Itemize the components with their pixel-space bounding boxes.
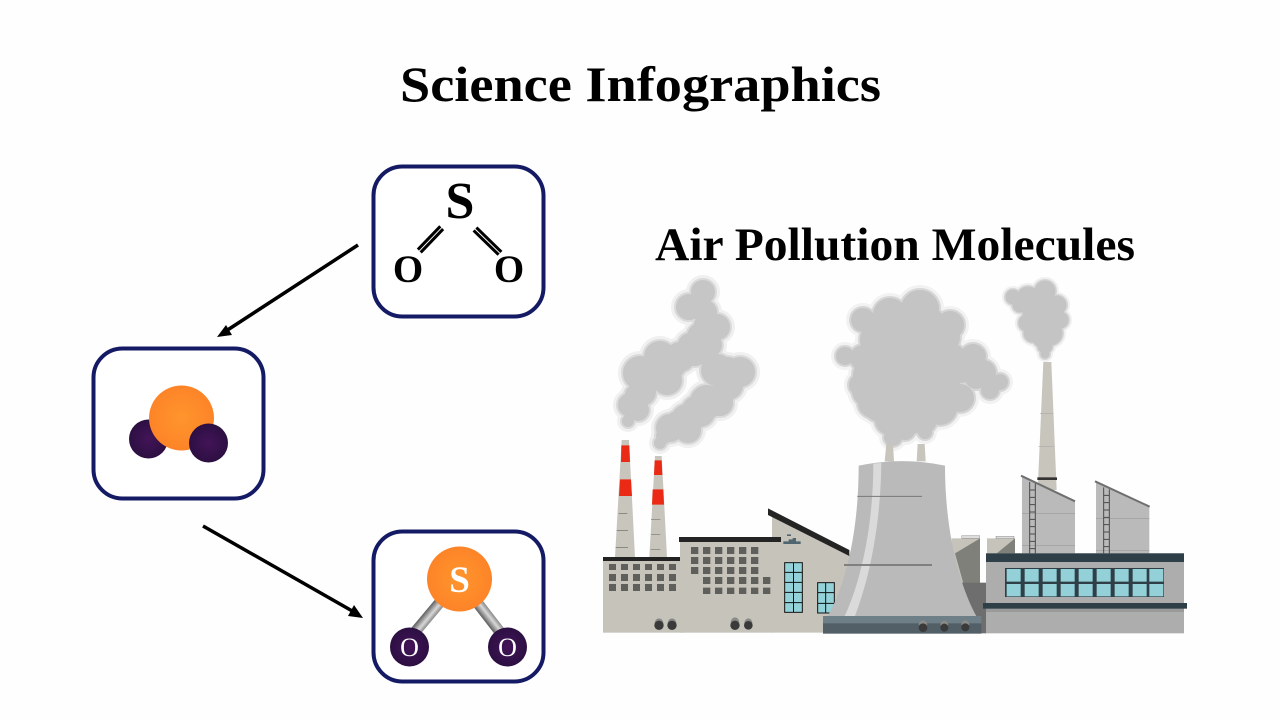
vents: pairs of pipes bbox=[654, 617, 753, 630]
panel: ball-and-stick model bbox=[374, 532, 544, 682]
shed: left bbox=[1021, 476, 1075, 553]
atom: left oxygen: O bbox=[400, 633, 419, 662]
atom: sulfur: S bbox=[449, 560, 470, 601]
illustration: factory with smoke bbox=[603, 282, 1187, 634]
panel: SO2 structural formula bbox=[374, 166, 544, 316]
smoke: tall stack bbox=[1007, 282, 1067, 357]
bond: right bbox=[476, 601, 500, 632]
chimney: second bbox=[649, 456, 667, 557]
double bond: left bbox=[418, 226, 443, 252]
panel: space-filling model bbox=[94, 348, 264, 498]
building: right block bbox=[983, 553, 1187, 633]
smoke: left chimneys bbox=[620, 282, 753, 447]
building: left block bbox=[603, 557, 684, 633]
chimney: first bbox=[615, 440, 635, 557]
window: short bbox=[818, 583, 834, 613]
atom: sulfur bbox=[149, 386, 214, 450]
window: tall bbox=[785, 563, 802, 612]
ladder: right bbox=[1104, 487, 1109, 553]
window band bbox=[1005, 568, 1164, 597]
ladder: left bbox=[1030, 482, 1035, 553]
right factory and cooling tower bbox=[823, 362, 1187, 634]
atom: right oxygen: O bbox=[498, 633, 517, 662]
label: right oxygen: O bbox=[494, 248, 524, 291]
atom: left oxygen bbox=[129, 420, 168, 458]
shed: right bbox=[1095, 481, 1150, 553]
arrow: formula to space-filling model bbox=[217, 245, 358, 337]
tower stacks bbox=[885, 444, 926, 461]
bond: left bbox=[415, 601, 441, 632]
atom: right oxygen bbox=[189, 424, 228, 462]
label: left oxygen: O bbox=[393, 248, 423, 291]
arrow: space-filling to ball-and-stick bbox=[203, 526, 363, 618]
background buildings bbox=[952, 536, 1015, 633]
building: middle block bbox=[679, 508, 853, 633]
cooling tower bbox=[823, 461, 981, 634]
left factory buildings bbox=[603, 440, 853, 633]
subtitle: air pollution molecules: Air Pollution Molecules bbox=[655, 219, 1135, 271]
atom: right oxygen bbox=[488, 628, 527, 666]
atom: sulfur bbox=[427, 546, 492, 612]
title: Science Infographics bbox=[400, 56, 881, 112]
label: sulfur: S bbox=[446, 173, 474, 230]
smoke: cooling tower bbox=[838, 292, 1006, 444]
double bond: right bbox=[474, 228, 501, 255]
tall stack bbox=[1037, 362, 1057, 490]
atom: left oxygen bbox=[390, 628, 429, 666]
vents: tower base bbox=[919, 620, 969, 632]
